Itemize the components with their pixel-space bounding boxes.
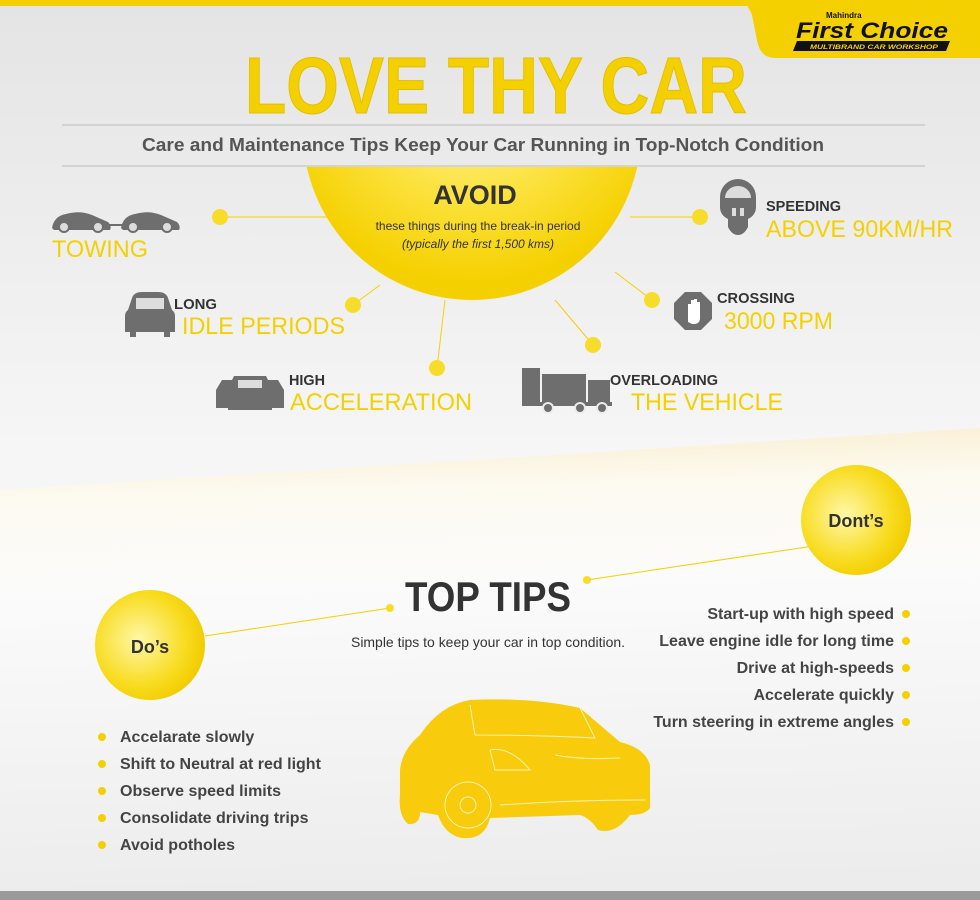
do's circle: Do’s — [131, 637, 169, 657]
avoid circle — [306, 167, 638, 300]
top tips heading — [351, 573, 625, 650]
avoid circle: (typically the first 1,500 kms) — [402, 237, 554, 251]
item: high acceleration — [216, 372, 472, 416]
top yellow bar — [0, 0, 980, 6]
item: overloading the vehicle: OVERLOADING — [610, 372, 718, 389]
bottom bar — [0, 891, 980, 900]
dont's list: Leave engine idle for long time — [659, 633, 894, 650]
item: high acceleration: ACCELERATION — [290, 389, 472, 416]
item: long idle periods: IDLE PERIODS — [182, 313, 345, 340]
logo: Mahindra First Choice: MULTIBRAND CAR WORKSHOP — [810, 44, 939, 51]
item: crossing 3000 rpm — [674, 290, 833, 335]
dont's circle: Dont’s — [828, 511, 884, 531]
avoid circle: AVOID — [433, 180, 517, 210]
item: crossing 3000 rpm: 3000 RPM — [724, 308, 833, 335]
dont's list — [653, 606, 910, 731]
item: high acceleration: HIGH — [289, 372, 325, 389]
do's list: Shift to Neutral at red light — [120, 756, 322, 773]
do's list — [98, 729, 322, 854]
item: towing: TOWING — [52, 236, 148, 263]
logo: Mahindra First Choice — [740, 0, 980, 58]
do's circle — [95, 590, 205, 700]
avoid circle: these things during the break-in period — [376, 219, 580, 233]
item: speeding — [720, 179, 953, 243]
top tips heading: Simple tips to keep your car in top condition. — [351, 634, 625, 650]
top tips heading: TOP TIPS — [405, 573, 571, 620]
item: overloading the vehicle — [522, 368, 783, 416]
dots — [212, 209, 708, 376]
dont's list: Drive at high-speeds — [737, 660, 894, 677]
item: speeding: ABOVE 90KM/HR — [766, 216, 953, 243]
dont's list: Start-up with high speed — [707, 606, 894, 623]
item: crossing 3000 rpm: CROSSING — [717, 290, 795, 307]
do's list: Consolidate driving trips — [120, 810, 309, 827]
connectors — [220, 217, 700, 368]
car illustration — [400, 699, 650, 838]
dont's list: Accelerate quickly — [753, 687, 894, 704]
subtitle: Care and Maintenance Tips Keep Your Car Running in Top-Notch Condition — [142, 134, 824, 155]
tip connectors — [205, 545, 820, 636]
do's list: Accelarate slowly — [120, 729, 254, 746]
item: long idle periods — [125, 292, 345, 340]
do's list: Observe speed limits — [120, 783, 281, 800]
dont's list: Turn steering in extreme angles — [653, 714, 894, 731]
item: towing — [52, 212, 180, 263]
logo: Mahindra First Choice: First Choice — [796, 18, 948, 43]
title: LOVE THY CAR — [245, 41, 747, 130]
item: speeding: SPEEDING — [766, 198, 841, 215]
logo: Mahindra First Choice: Mahindra — [826, 11, 862, 20]
item: long idle periods: LONG — [174, 296, 217, 313]
item: overloading the vehicle: THE VEHICLE — [631, 389, 783, 416]
dont's circle — [801, 465, 911, 575]
do's list: Avoid potholes — [120, 837, 235, 854]
